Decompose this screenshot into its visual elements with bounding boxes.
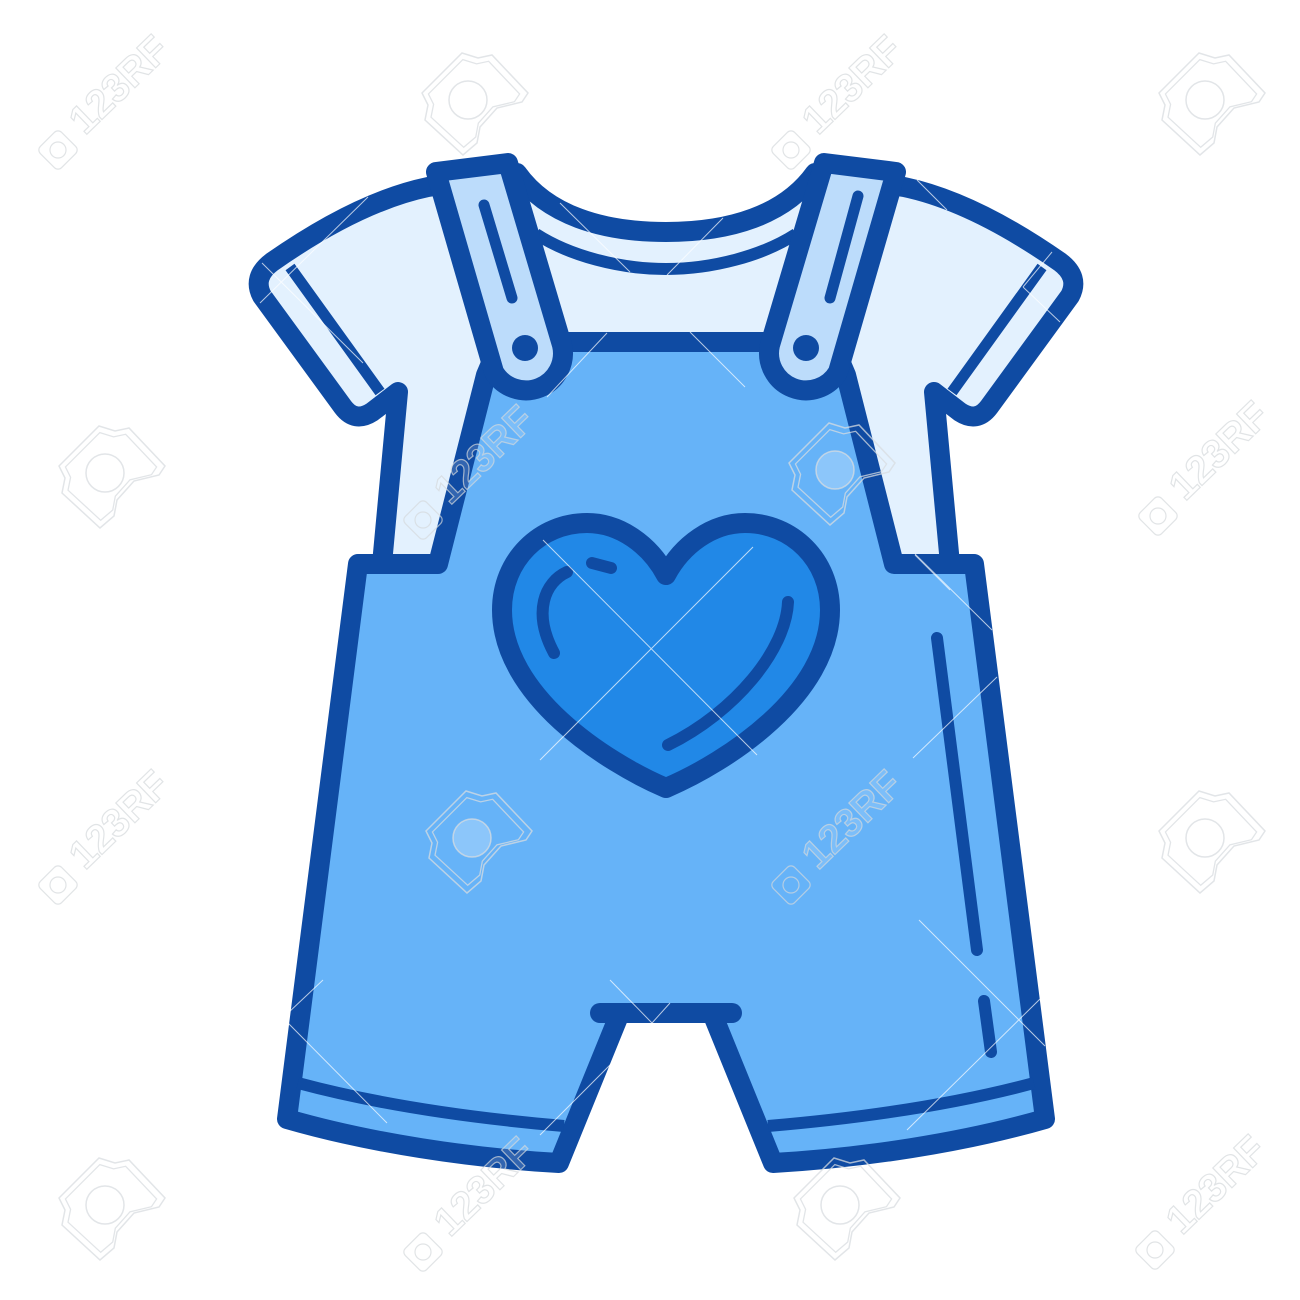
left strap xyxy=(436,163,563,390)
right strap xyxy=(769,163,896,390)
hem right xyxy=(768,1083,1034,1126)
crotch seam xyxy=(600,1003,732,1023)
watermark: 123RF text marks: 123RF xyxy=(426,397,543,512)
icon: baby romper xyxy=(259,163,1073,1163)
watermark: 123RF text marks: 123RF xyxy=(61,27,178,142)
watermark: 123RF text marks: 123RF xyxy=(1161,393,1278,508)
hem left xyxy=(298,1083,564,1126)
watermark: small logos beside the text xyxy=(37,129,1179,1273)
watermark: hairlines xyxy=(260,180,1060,1135)
watermark: 123RF text marks: 123RF xyxy=(1158,1127,1275,1242)
watermark: 123RF text marks: 123RF xyxy=(794,27,911,142)
watermark: 123RF text marks: 123RF xyxy=(426,1129,543,1244)
heart pocket xyxy=(502,523,830,788)
side highlight xyxy=(937,638,991,1052)
t-shirt xyxy=(259,173,1073,564)
watermark: 123RF text marks: 123RF xyxy=(61,762,178,877)
overalls body xyxy=(287,342,1045,1163)
watermark: 123RF text marks: 123RF xyxy=(794,762,911,877)
